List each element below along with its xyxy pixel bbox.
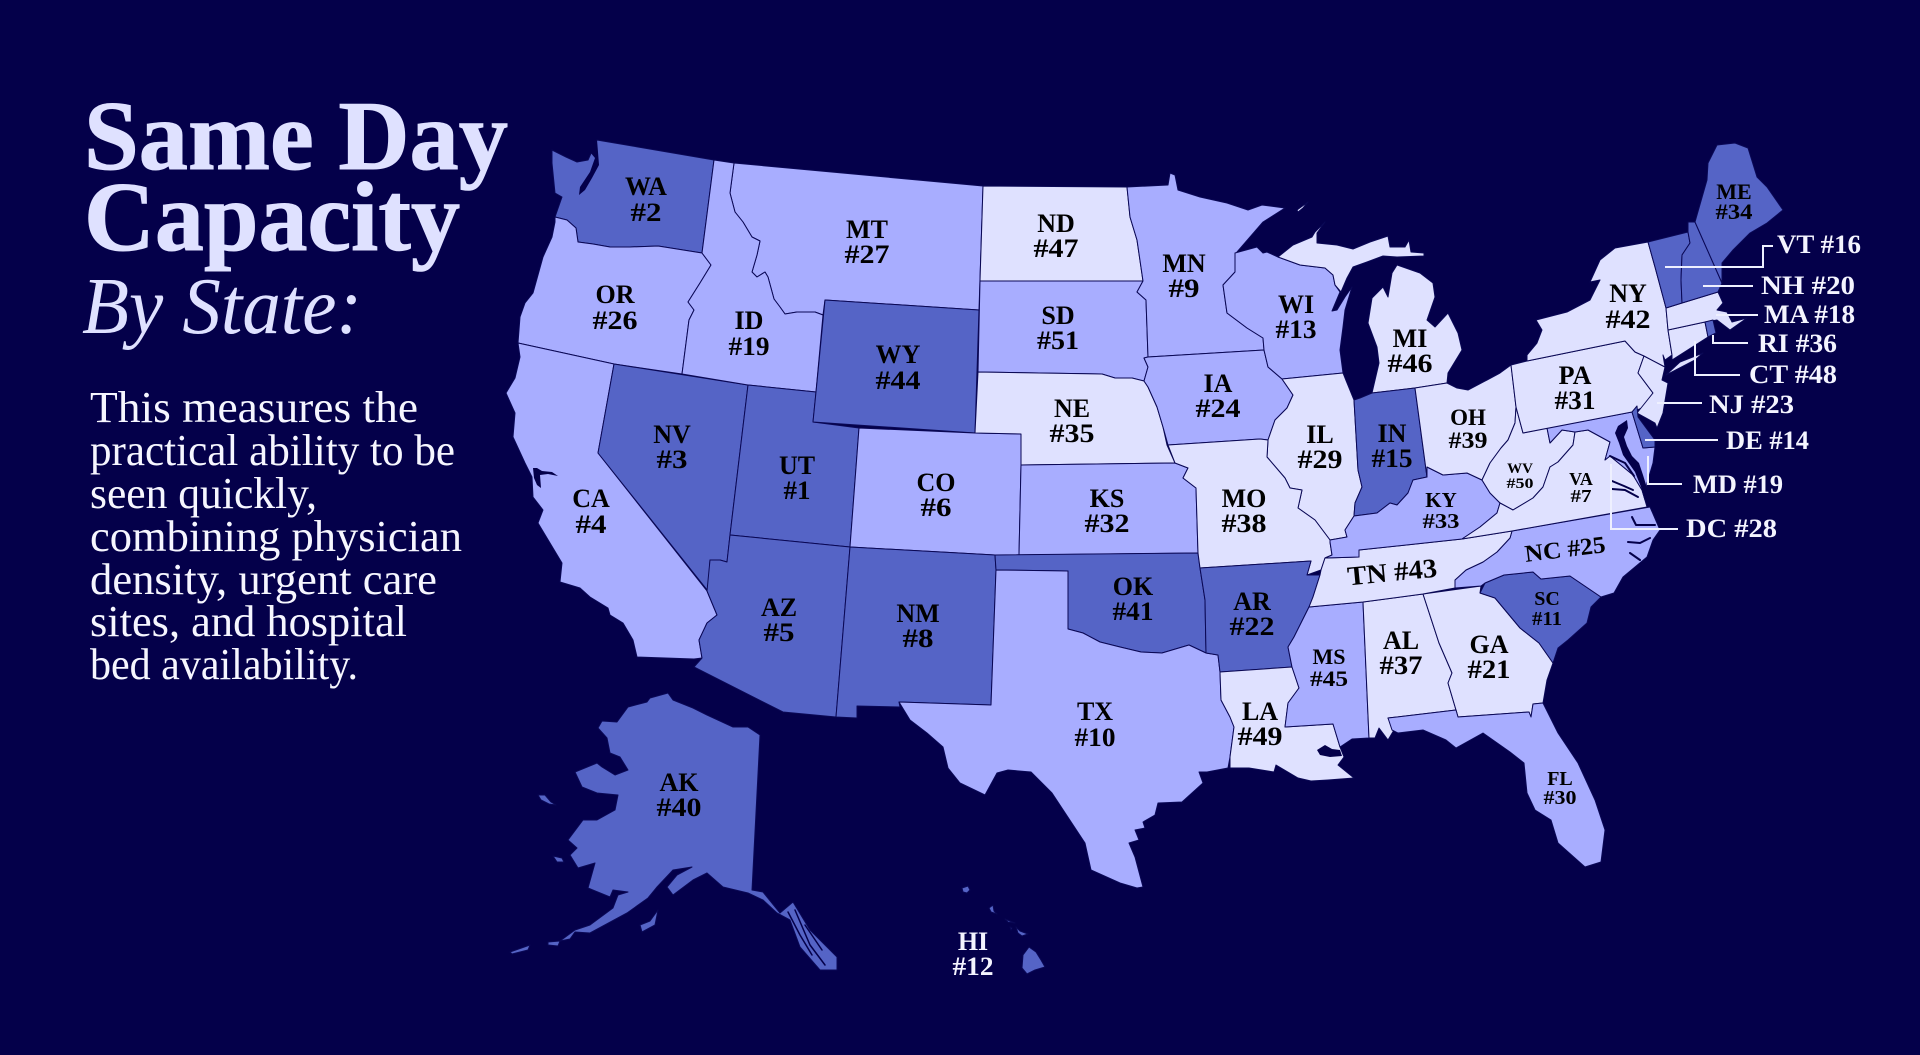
state: NC <box>1455 507 1660 597</box>
state: IL: #29 <box>1298 445 1342 474</box>
state: TN: TN #43 <box>1346 553 1438 591</box>
state: IA: #24 <box>1196 394 1240 423</box>
state: TX: TX <box>1077 697 1113 726</box>
state: CA: CA <box>572 484 610 513</box>
state: ME <box>1695 143 1783 283</box>
state: MI <box>1278 202 1462 393</box>
callout: DC <box>1611 464 1777 543</box>
state: IN <box>1354 388 1427 516</box>
callout: RI: RI #36 <box>1758 329 1837 358</box>
state: MN <box>1127 173 1285 357</box>
description text: This measures the <box>90 383 418 432</box>
state: VA: VA <box>1569 469 1593 489</box>
state: FL: #30 <box>1544 787 1576 809</box>
state: DE <box>1632 406 1655 448</box>
state: IL <box>1267 373 1362 540</box>
state: ID: ID <box>735 306 763 335</box>
state: ME: #34 <box>1716 199 1752 224</box>
callout: RI <box>1713 329 1837 358</box>
state: MI: MI <box>1393 324 1427 353</box>
state: WA <box>552 140 714 253</box>
state: NV: NV <box>653 420 691 449</box>
state: MS: MS <box>1312 644 1346 669</box>
description text <box>90 383 462 689</box>
title: By State: <box>82 263 362 351</box>
state: OH: OH <box>1450 405 1486 430</box>
state: NY: NY <box>1609 279 1647 308</box>
state: UT: #1 <box>784 476 810 505</box>
state: VA <box>1462 430 1647 539</box>
state: KS <box>1019 463 1198 555</box>
state: NJ <box>1637 356 1668 428</box>
state: LA <box>1220 667 1354 781</box>
state: ND: ND <box>1037 209 1075 238</box>
state: NH <box>1681 222 1722 303</box>
callout: VT <box>1665 230 1861 267</box>
state: AZ <box>694 535 850 717</box>
state: OH <box>1415 365 1516 480</box>
state: OR <box>518 217 711 374</box>
state: WI: WI <box>1278 290 1314 319</box>
state: AR: #22 <box>1230 612 1274 641</box>
state: KY: KY <box>1425 488 1457 512</box>
state: AZ: AZ <box>761 593 797 622</box>
state: ND <box>980 186 1143 281</box>
state: NY: #42 <box>1606 305 1650 334</box>
state: SD: SD <box>1041 301 1075 330</box>
callout: NH: NH #20 <box>1761 271 1855 300</box>
state: AR <box>1200 561 1320 672</box>
state: NE: NE <box>1054 394 1090 423</box>
state: TN <box>1309 531 1512 607</box>
state: OH: #39 <box>1448 428 1488 453</box>
state: SD: #51 <box>1037 326 1079 355</box>
state: NV: #3 <box>656 445 688 474</box>
state: HI: HI <box>958 927 988 956</box>
state: TX: #10 <box>1074 723 1116 752</box>
state: GA: #21 <box>1468 655 1510 684</box>
state: NM: NM <box>896 599 940 628</box>
state: SC: #11 <box>1532 608 1562 630</box>
state: IA: IA <box>1204 369 1233 398</box>
state: KY: #33 <box>1422 509 1460 533</box>
state: GA <box>1423 586 1553 717</box>
state: AK <box>510 693 837 970</box>
state: MS <box>1285 602 1369 747</box>
callout: NJ: NJ #23 <box>1709 390 1794 419</box>
state: OK <box>995 553 1206 653</box>
state: UT <box>730 385 859 547</box>
state: TX <box>899 570 1234 888</box>
callout: DC: DC #28 <box>1686 514 1777 543</box>
state: MT <box>730 163 983 315</box>
state: KY <box>1325 467 1500 558</box>
state: IN: #15 <box>1372 444 1412 473</box>
state: MN: MN <box>1162 249 1206 278</box>
state: MT: MT <box>846 215 888 244</box>
state: CO: CO <box>916 468 956 497</box>
description text: seen quickly, <box>90 469 317 518</box>
state: WY: #44 <box>876 366 920 395</box>
state: ME: ME <box>1716 179 1752 204</box>
state: AK: #40 <box>656 793 702 822</box>
state: WV: WV <box>1507 461 1533 477</box>
state: NE <box>975 372 1175 465</box>
callout: MD <box>1648 456 1783 499</box>
state: NC: NC #25 <box>1523 532 1607 568</box>
map of US states <box>506 140 1783 981</box>
state: WI: #13 <box>1276 315 1316 344</box>
callout: MA: MA #18 <box>1764 300 1855 329</box>
description text: combining physician <box>90 512 462 561</box>
state: OK: OK <box>1113 572 1154 601</box>
state: AZ: #5 <box>764 618 794 647</box>
callout: NJ <box>1657 390 1794 419</box>
description text: density, urgent care <box>90 555 437 604</box>
state: AL: #37 <box>1380 651 1422 680</box>
state: NE: #35 <box>1050 419 1094 448</box>
state: OR: OR <box>596 280 635 309</box>
callout: MA <box>1716 300 1855 329</box>
state: CO <box>850 428 1021 555</box>
state: PA <box>1511 341 1653 433</box>
state: ID: #19 <box>728 332 770 361</box>
callout: MD: MD #19 <box>1693 470 1783 499</box>
state: WA: WA <box>625 172 667 201</box>
description text: sites, and hospital <box>90 597 407 646</box>
state: AL <box>1363 594 1456 740</box>
description text: bed availability. <box>90 640 358 689</box>
state: MI: #46 <box>1388 349 1432 378</box>
state: WY: WY <box>876 340 921 369</box>
state: WA: #2 <box>630 198 662 227</box>
state: WI <box>1223 247 1352 379</box>
state: OR: #26 <box>592 306 638 335</box>
callout: CT <box>1695 341 1837 389</box>
callout: CT: CT #48 <box>1749 360 1837 389</box>
state: IN: IN <box>1378 419 1407 448</box>
state: HI: #12 <box>952 952 994 981</box>
state: NY <box>1527 242 1703 375</box>
state: WY <box>813 300 979 433</box>
state: AK: AK <box>660 768 699 797</box>
state: IA <box>1144 350 1293 445</box>
state: RI <box>1705 320 1716 337</box>
state: LA: LA <box>1242 697 1278 726</box>
state: ND: #47 <box>1034 234 1078 263</box>
state: PA: PA <box>1559 361 1592 390</box>
state: CA: #4 <box>576 510 606 539</box>
state: MO: MO <box>1222 484 1266 513</box>
state: MS: #45 <box>1310 666 1348 691</box>
state: AR: AR <box>1233 587 1271 616</box>
state: AL: AL <box>1383 626 1419 655</box>
state: MT: #27 <box>844 240 890 269</box>
state: SC: SC <box>1534 588 1560 610</box>
description text: practical ability to be <box>90 426 455 475</box>
state: MD <box>1547 412 1655 500</box>
state: CA <box>506 343 717 659</box>
state: FL: FL <box>1547 768 1573 790</box>
state: CO: #6 <box>920 493 952 522</box>
state: WV: #50 <box>1506 476 1534 492</box>
callout: DE: DE #14 <box>1726 426 1809 455</box>
state: CT <box>1668 322 1708 360</box>
state: WV <box>1482 407 1575 510</box>
state: HI <box>952 886 1045 981</box>
state: MO: #38 <box>1222 509 1266 538</box>
state: PA: #31 <box>1554 386 1596 415</box>
state: MN: #9 <box>1168 274 1200 303</box>
state: NV <box>598 364 748 591</box>
state: LA: #49 <box>1238 722 1282 751</box>
title: Capacity <box>84 163 460 272</box>
title: Same Day <box>84 82 508 191</box>
state: KS: #32 <box>1084 509 1130 538</box>
state: KS: KS <box>1090 484 1124 513</box>
state: SC <box>1480 572 1601 663</box>
state: FL <box>1388 703 1605 867</box>
state: OK: #41 <box>1112 597 1154 626</box>
callout: VT: VT #16 <box>1777 230 1861 259</box>
state: GA: GA <box>1470 630 1509 659</box>
title <box>82 82 508 351</box>
state: SD <box>978 281 1148 381</box>
state: ID <box>682 160 823 392</box>
state: MA <box>1666 292 1747 330</box>
state: NM: #8 <box>902 624 934 653</box>
state: VA: #7 <box>1570 486 1592 506</box>
state: MO <box>1168 439 1332 575</box>
state: UT: UT <box>779 451 815 480</box>
state: IL: IL <box>1306 420 1334 449</box>
state: VT <box>1648 232 1690 308</box>
state: NM <box>836 547 996 718</box>
